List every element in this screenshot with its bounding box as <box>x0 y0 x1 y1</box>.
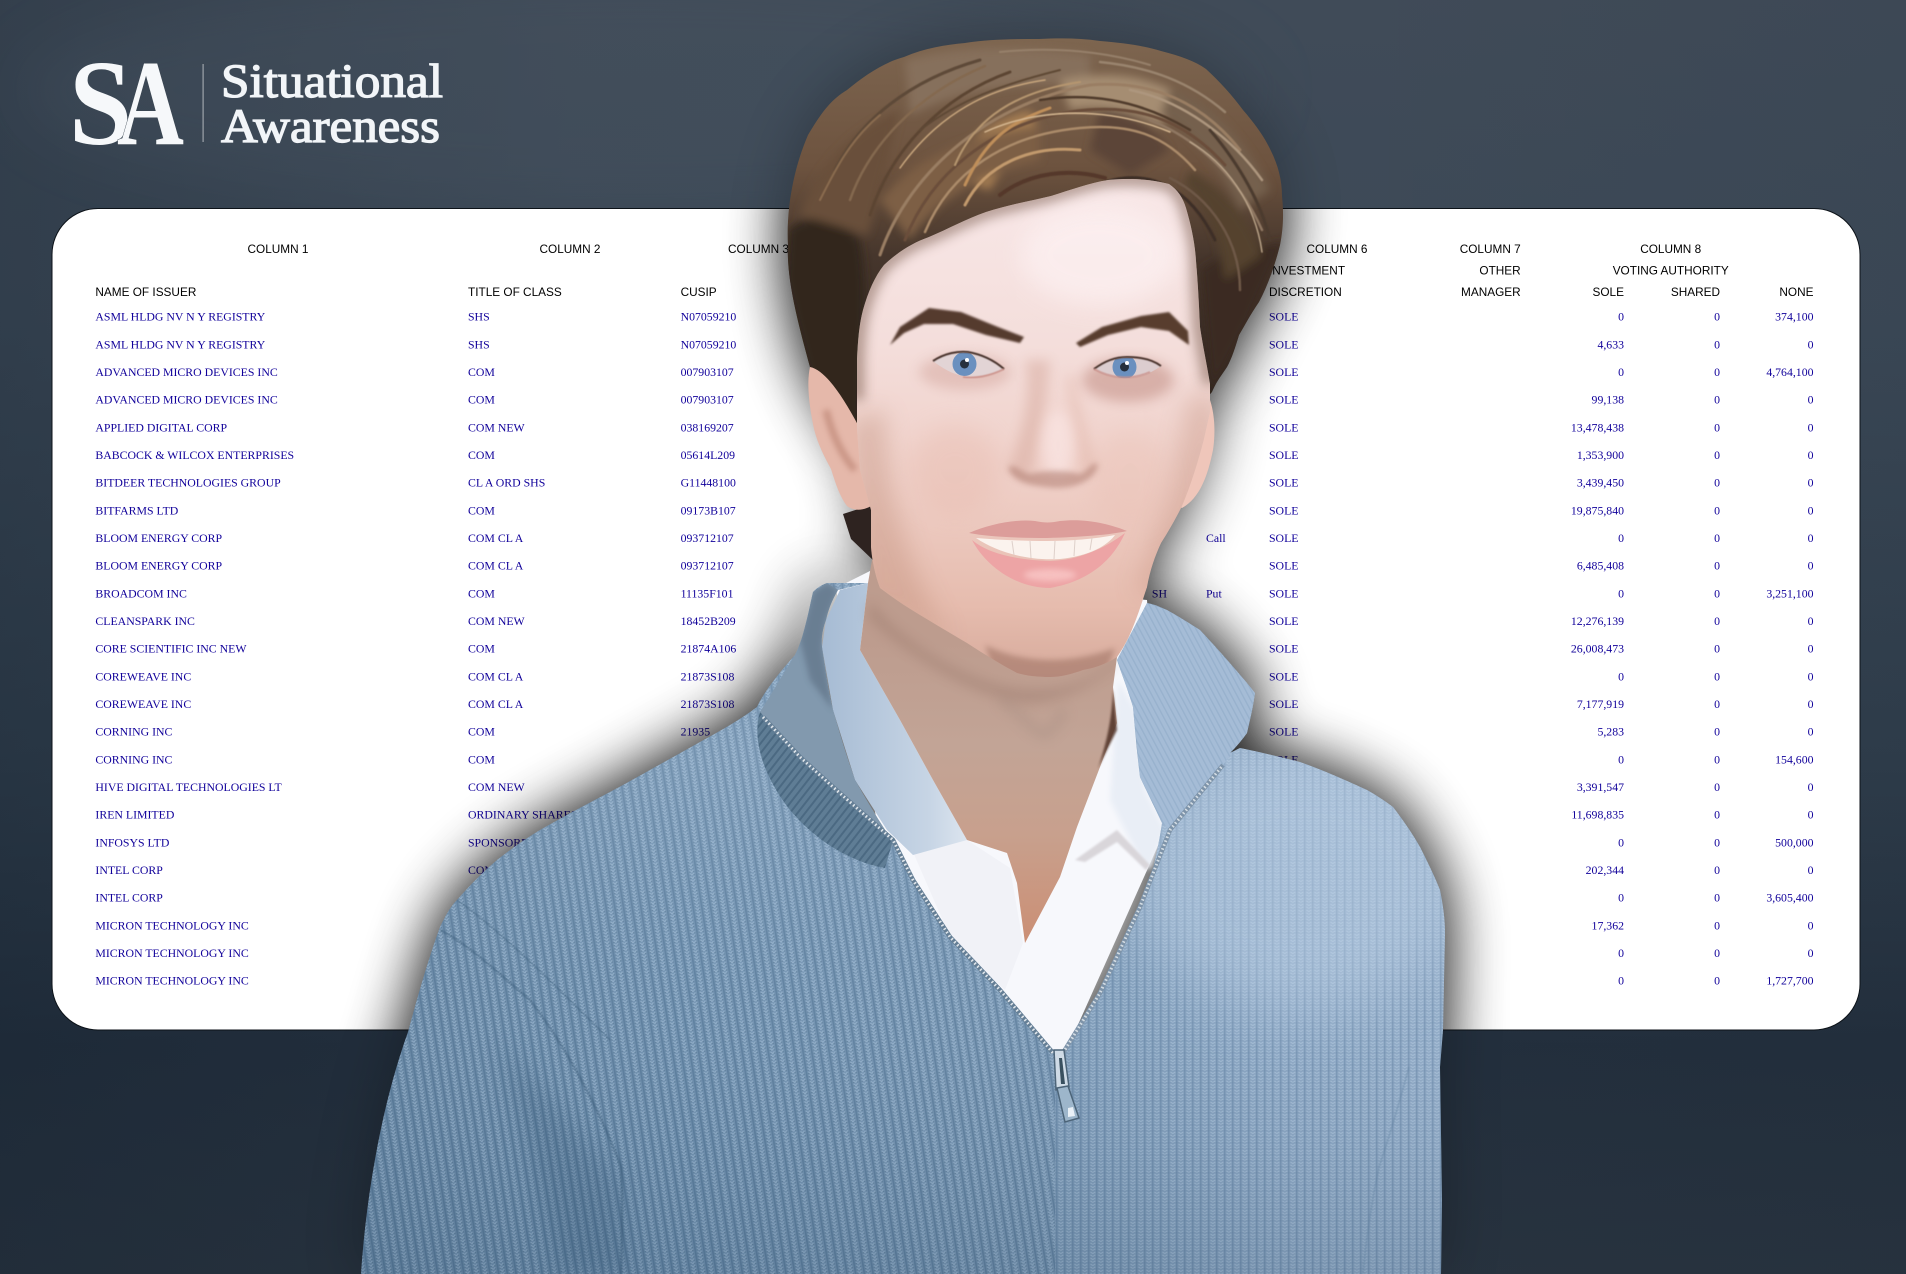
right eyebrow <box>1076 312 1189 347</box>
column: name of issuer <box>95 310 294 988</box>
column: title of class: SHS <box>468 310 490 324</box>
hair mass <box>788 38 1283 450</box>
column: voting authority shared: 0 <box>1714 586 1720 600</box>
column: title of class: COM <box>468 365 495 379</box>
column: voting authority sole: 12,276,139 <box>1571 614 1624 628</box>
column: voting authority none: 500,000 <box>1775 835 1814 849</box>
column: cusip: 09173B107 <box>681 503 736 517</box>
column: voting authority shared: 0 <box>1714 310 1720 324</box>
column: voting authority none: 0 <box>1808 476 1814 490</box>
column: voting authority shared: 0 <box>1714 642 1720 656</box>
column: voting authority sole: 0 <box>1618 531 1624 545</box>
right eye <box>1094 355 1161 379</box>
column: cusip: 093712107 <box>681 531 734 545</box>
column: voting authority none: 0 <box>1808 697 1814 711</box>
left collar <box>759 583 893 865</box>
column: voting authority sole: 6,485,408 <box>1577 559 1624 573</box>
column: put/call: SH <box>1152 586 1167 600</box>
column: title of class: COM <box>468 393 495 407</box>
column: investment discretion: SOLE <box>1269 614 1298 628</box>
column: investment discretion: SOLE <box>1269 669 1298 683</box>
column: voting authority shared: 0 <box>1714 393 1720 407</box>
column: investment discretion: SOLE <box>1269 337 1298 351</box>
column: voting authority shared: 0 <box>1714 752 1720 766</box>
person drop shadow on panel <box>357 208 1494 1030</box>
raglan seams <box>440 900 1409 1274</box>
logo wordmark: Situational <box>221 55 443 108</box>
column headers: DISCRETION <box>1269 285 1342 299</box>
column: voting authority sole: 3,391,547 <box>1577 780 1624 794</box>
column: name of issuer: MICRON TECHNOLOGY INC <box>95 946 249 960</box>
column: name of issuer: INTEL CORP <box>95 891 163 905</box>
column: voting authority none: 374,100 <box>1775 310 1814 324</box>
column: voting authority none: 0 <box>1808 808 1814 822</box>
column: voting authority sole: 0 <box>1618 891 1624 905</box>
fine strands <box>820 50 1270 290</box>
left ear <box>808 367 875 510</box>
nose shading <box>1008 360 1050 480</box>
column: voting authority shared <box>1714 310 1720 988</box>
nose <box>1008 463 1098 488</box>
logo wordmark <box>221 55 443 153</box>
column: cusip: 05614L209 <box>681 448 735 462</box>
column: name of issuer: CORNING INC <box>95 752 173 766</box>
column: voting authority shared: 0 <box>1714 918 1720 932</box>
logo: Situational Awareness <box>69 36 443 171</box>
column headers: SHARED <box>1671 285 1720 299</box>
column headers: VOTING AUTHORITY <box>1613 264 1729 278</box>
panel: 13F holdings table <box>52 208 1860 1030</box>
column: cusip: 093712107 <box>681 559 734 573</box>
column: put/call: Call <box>1206 531 1226 545</box>
column: voting authority sole: 7,177,919 <box>1577 697 1624 711</box>
column: name of issuer: BLOOM ENERGY CORP <box>95 531 223 545</box>
column: voting authority none <box>1766 310 1814 988</box>
column: name of issuer: CLEANSPARK INC <box>95 614 195 628</box>
column: cusip: 21874A106 <box>681 642 736 656</box>
column: cusip: N07059210 <box>681 310 736 324</box>
column: voting authority shared: 0 <box>1714 476 1720 490</box>
column: voting authority sole: 0 <box>1618 310 1624 324</box>
column: title of class: COM <box>468 448 495 462</box>
column: voting authority shared: 0 <box>1714 863 1720 877</box>
column: name of issuer: HIVE DIGITAL TECHNOLOGIES LT <box>95 780 283 794</box>
column: voting authority sole <box>1571 310 1624 988</box>
column: voting authority none: 1,727,700 <box>1766 974 1814 988</box>
column: title of class: COM <box>468 503 495 517</box>
column: investment discretion: SOLE <box>1269 642 1298 656</box>
column: voting authority none: 0 <box>1808 393 1814 407</box>
column: title of class: COM NEW <box>468 614 526 628</box>
column: name of issuer: COREWEAVE INC <box>95 669 191 683</box>
column: title of class: ORDINARY SHARES <box>468 808 577 822</box>
column: name of issuer: MICRON TECHNOLOGY INC <box>95 974 249 988</box>
column headers: TITLE OF CLASS <box>468 285 562 299</box>
column: voting authority sole: 0 <box>1618 835 1624 849</box>
column headers: COLUMN 7 <box>1460 242 1521 256</box>
column headers: NONE <box>1779 285 1814 299</box>
column: cusip: 007903107 <box>681 365 734 379</box>
logo divider <box>202 64 204 142</box>
column: cusip: 21935 <box>681 725 710 739</box>
left eyebrow <box>890 308 1024 345</box>
right shoulder highlight <box>1130 750 1470 1010</box>
column: voting authority none: 0 <box>1808 669 1814 683</box>
column: name of issuer: ASML HLDG NV N Y REGISTRY <box>95 337 266 351</box>
column: title of class: SHS <box>468 337 490 351</box>
column: voting authority shared: 0 <box>1714 420 1720 434</box>
column: put/call: Put <box>1206 586 1222 600</box>
column: voting authority sole: 0 <box>1618 669 1624 683</box>
broad hair tones <box>788 49 1280 381</box>
column: cusip: 21873S108 <box>681 669 734 683</box>
portrait: young man in blue zip sweater <box>340 38 1470 1274</box>
column: title of class: COM <box>468 863 495 877</box>
column: voting authority sole: 26,008,473 <box>1571 642 1624 656</box>
column: name of issuer: IREN LIMITED <box>95 808 175 822</box>
column: voting authority none: 0 <box>1808 503 1814 517</box>
column: title of class: COM <box>468 725 495 739</box>
column: voting authority shared: 0 <box>1714 780 1720 794</box>
column: voting authority shared: 0 <box>1714 365 1720 379</box>
column: voting authority shared: 0 <box>1714 669 1720 683</box>
column headers: SOLE <box>1593 285 1624 299</box>
column headers: COLUMN 6 <box>1307 242 1368 256</box>
column: title of class <box>468 310 577 877</box>
column: voting authority sole: 4,633 <box>1597 337 1624 351</box>
column: investment discretion: SOLE <box>1269 476 1298 490</box>
knit texture right <box>1055 580 1455 1274</box>
column headers <box>95 242 1814 299</box>
column: name of issuer: BABCOCK & WILCOX ENTERPRISES <box>95 448 294 462</box>
column: name of issuer: INFOSYS LTD <box>95 835 170 849</box>
column: voting authority none: 0 <box>1808 531 1814 545</box>
column: title of class: CL A ORD SHS <box>468 476 545 490</box>
column: voting authority shared: 0 <box>1714 697 1720 711</box>
column: name of issuer: BITDEER TECHNOLOGIES GROUP <box>95 476 281 490</box>
sweater body <box>361 583 1445 1274</box>
column: name of issuer: BITFARMS LTD <box>95 503 179 517</box>
column: voting authority none: 154,600 <box>1775 752 1814 766</box>
left arm shadow <box>508 1064 624 1274</box>
person drop shadow on background <box>361 38 1445 1274</box>
column: title of class: COM CL A <box>468 697 524 711</box>
column: voting authority sole: 0 <box>1618 586 1624 600</box>
column: title of class: COM <box>468 752 495 766</box>
column: name of issuer: ADVANCED MICRO DEVICES INC <box>95 393 278 407</box>
column: voting authority shared: 0 <box>1714 946 1720 960</box>
column: title of class: COM CL A <box>468 559 524 573</box>
column headers: COLUMN 3 <box>728 242 789 256</box>
column: voting authority none: 0 <box>1808 918 1814 932</box>
column: name of issuer: INTEL CORP <box>95 863 163 877</box>
column: voting authority sole: 13,478,438 <box>1571 420 1624 434</box>
column: voting authority sole: 0 <box>1618 752 1624 766</box>
column: name of issuer: CORNING INC <box>95 725 173 739</box>
column headers: CUSIP <box>681 285 717 299</box>
column: cusip: 21873S108 <box>681 697 734 711</box>
cheek and jaw shading <box>857 406 939 625</box>
column: investment discretion: SOLE <box>1269 448 1298 462</box>
panel card <box>52 208 1860 1030</box>
column: title of class: COM NEW <box>468 420 526 434</box>
column: cusip: G11448100 <box>681 476 736 490</box>
column: cusip: 18452B209 <box>681 614 736 628</box>
logo mark: SA monogram: A <box>117 36 184 171</box>
column: voting authority shared: 0 <box>1714 835 1720 849</box>
logo mark: SA monogram: S <box>69 36 132 171</box>
column: title of class: SPONSORED ADR <box>468 835 564 849</box>
column: voting authority none: 0 <box>1808 946 1814 960</box>
column: cusip: 007903107 <box>681 393 734 407</box>
neck <box>860 560 1147 943</box>
knit texture left <box>340 580 1055 1274</box>
column: voting authority none: 0 <box>1808 448 1814 462</box>
column: cusip: 038169207 <box>681 420 734 434</box>
column: voting authority none: 0 <box>1808 780 1814 794</box>
right ear <box>1165 400 1214 508</box>
logo mark: SA monogram <box>69 36 184 171</box>
column: investment discretion <box>1269 310 1298 766</box>
shirt collar shade <box>822 583 967 855</box>
column: voting authority shared: 0 <box>1714 725 1720 739</box>
column: title of class: COM <box>468 586 495 600</box>
column: voting authority sole: 0 <box>1618 365 1624 379</box>
column: voting authority sole: 0 <box>1618 946 1624 960</box>
column: voting authority none: 3,605,400 <box>1766 891 1814 905</box>
column: voting authority none: 3,251,100 <box>1766 586 1814 600</box>
forehead highlight <box>1028 217 1172 302</box>
column: voting authority none: 4,764,100 <box>1766 365 1814 379</box>
soft hairline <box>857 179 1210 400</box>
column: title of class: COM CL A <box>468 669 524 683</box>
column: investment discretion: SOLE <box>1269 420 1298 434</box>
column: name of issuer: ASML HLDG NV N Y REGISTRY <box>95 310 266 324</box>
column: cusip: 11135F101 <box>681 586 734 600</box>
column: voting authority shared: 0 <box>1714 337 1720 351</box>
column: investment discretion: SOLE <box>1269 586 1298 600</box>
column: voting authority shared: 0 <box>1714 808 1720 822</box>
column: name of issuer: ADVANCED MICRO DEVICES INC <box>95 365 278 379</box>
column: voting authority shared: 0 <box>1714 974 1720 988</box>
column: name of issuer: CORE SCIENTIFIC INC NEW <box>95 642 247 656</box>
white shirt <box>836 570 1165 1065</box>
column: investment discretion: SOLE <box>1269 697 1298 711</box>
column: voting authority shared: 0 <box>1714 891 1720 905</box>
column: voting authority none: 0 <box>1808 863 1814 877</box>
column headers: MANAGER <box>1461 285 1521 299</box>
sweater <box>340 580 1470 1274</box>
column: voting authority sole: 99,138 <box>1592 393 1624 407</box>
column: title of class: COM NEW <box>468 780 526 794</box>
column: voting authority none: 0 <box>1808 614 1814 628</box>
column: voting authority sole: 19,875,840 <box>1571 503 1624 517</box>
column: name of issuer: MICRON TECHNOLOGY INC <box>95 918 249 932</box>
column: name of issuer: COREWEAVE INC <box>95 697 191 711</box>
column: name of issuer: APPLIED DIGITAL CORP <box>95 420 227 434</box>
column: voting authority shared: 0 <box>1714 531 1720 545</box>
left eye <box>933 352 1004 378</box>
tonal lighting <box>340 580 1450 1274</box>
column headers: NAME OF ISSUER <box>95 285 196 299</box>
column: voting authority sole: 1,353,900 <box>1577 448 1624 462</box>
column: title of class: COM CL A <box>468 531 524 545</box>
column: cusip <box>681 310 736 739</box>
column: name of issuer: BROADCOM INC <box>95 586 187 600</box>
column: investment discretion: SOLE <box>1269 752 1298 766</box>
column: investment discretion: SOLE <box>1269 559 1298 573</box>
face <box>850 179 1220 690</box>
column: title of class: COM <box>468 642 495 656</box>
column: investment discretion: SOLE <box>1269 531 1298 545</box>
column: voting authority none: 0 <box>1808 642 1814 656</box>
column: voting authority none: 0 <box>1808 559 1814 573</box>
column: voting authority sole: 0 <box>1618 974 1624 988</box>
column: voting authority none: 0 <box>1808 420 1814 434</box>
column headers: COLUMN 8 <box>1640 242 1702 256</box>
column: voting authority none: 0 <box>1808 337 1814 351</box>
column: cusip: N07059210 <box>681 337 736 351</box>
right zipper <box>1063 765 1223 1053</box>
column: name of issuer: BLOOM ENERGY CORP <box>95 559 223 573</box>
left zipper <box>763 717 1053 1053</box>
column: investment discretion: SOLE <box>1269 365 1298 379</box>
column: voting authority sole: 5,283 <box>1597 725 1624 739</box>
column headers: COLUMN 2 <box>540 242 600 256</box>
column: investment discretion: SOLE <box>1269 725 1298 739</box>
column: voting authority shared: 0 <box>1714 503 1720 517</box>
column: voting authority sole: 17,362 <box>1592 918 1624 932</box>
column: voting authority shared: 0 <box>1714 559 1720 573</box>
logo wordmark: Awareness <box>221 100 440 153</box>
column: voting authority shared: 0 <box>1714 614 1720 628</box>
column: voting authority shared: 0 <box>1714 448 1720 462</box>
column: investment discretion: SOLE <box>1269 503 1298 517</box>
right collar <box>1117 603 1255 830</box>
column headers: OTHER <box>1479 264 1521 278</box>
hair <box>785 38 1285 562</box>
zipper pull <box>1054 1050 1079 1122</box>
column: voting authority sole: 202,344 <box>1586 863 1624 877</box>
column headers: INVESTMENT <box>1269 264 1345 278</box>
column: voting authority none: 0 <box>1808 725 1814 739</box>
column: investment discretion: SOLE <box>1269 393 1298 407</box>
column: voting authority sole: 3,439,450 <box>1577 476 1624 490</box>
mouth <box>969 520 1127 588</box>
eye socket shading <box>919 354 1011 390</box>
column: voting authority sole: 11,698,835 <box>1571 808 1624 822</box>
column headers: COLUMN 1 <box>248 242 308 256</box>
column: investment discretion: SOLE <box>1269 310 1298 324</box>
column: put/call <box>1152 531 1226 600</box>
